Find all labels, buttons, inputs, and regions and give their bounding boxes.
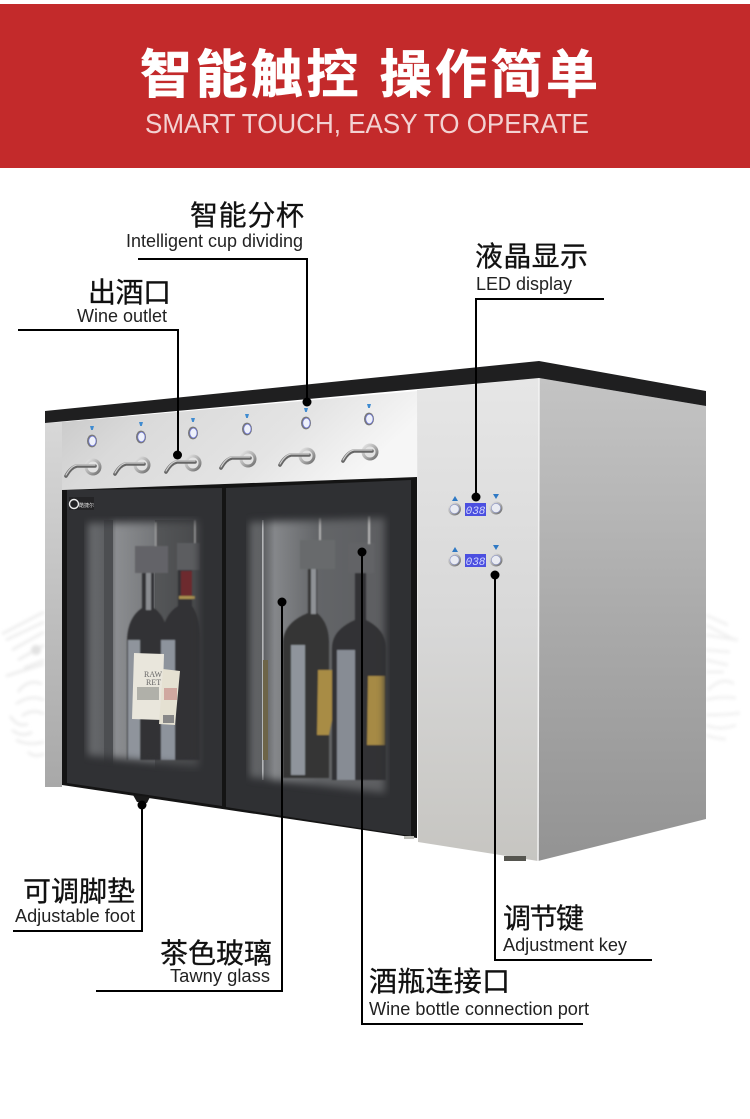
subtitle: SMART TOUCH, EASY TO OPERATE (145, 108, 589, 139)
product: wine dispenser cabinet (45, 361, 706, 861)
left stainless strip (45, 422, 62, 787)
header banner (0, 4, 750, 168)
callout: adjustment key: 调节键 (503, 903, 584, 934)
bottle four (332, 572, 386, 780)
door logo: 酷捷尔 (79, 502, 94, 509)
title: 智能触控 操作简单 (140, 47, 598, 105)
door logo (69, 497, 94, 510)
wine label one (132, 653, 164, 720)
callout: wine bottle connection port: Wine bottle connection port (369, 998, 589, 1019)
wine label one: RAW (144, 670, 162, 679)
black top slab (45, 361, 706, 423)
callout: adjustable foot (13, 800, 146, 931)
callout: wine outlet (18, 277, 182, 460)
left door (67, 488, 222, 806)
door surround (62, 477, 417, 838)
wine label two (159, 669, 180, 725)
callout: wine bottle connection port: 酒瓶连接口 (369, 966, 510, 997)
touch buttons (87, 404, 374, 447)
callout: tawny glass: Tawny glass (170, 965, 270, 986)
callout: LED display (472, 241, 604, 502)
wine label one: RET (146, 678, 161, 687)
LED controls: 038 (466, 506, 486, 518)
callout: LED display: LED display (476, 273, 573, 294)
callout: wine outlet: Wine outlet (77, 305, 167, 326)
background watermark: right vineyard (706, 615, 740, 739)
callout: adjustment key: Adjustment key (503, 934, 628, 955)
callout: adjustable foot: Adjustable foot (15, 905, 135, 926)
bottle three (283, 568, 329, 778)
callout: LED display: 液晶显示 (475, 241, 588, 272)
callout: tawny glass: 茶色玻璃 (160, 938, 272, 969)
callout: adjustable foot: 可调脚垫 (23, 876, 135, 907)
background watermark: left vineyard (2, 612, 44, 756)
bottle two (162, 570, 200, 760)
LED controls (448, 494, 502, 569)
left window with bottles (84, 516, 205, 772)
wine spouts (66, 444, 378, 476)
bottle one (127, 570, 168, 760)
callout: tawny glass (96, 598, 286, 991)
feet (133, 795, 526, 861)
control panel (62, 391, 417, 490)
callout: intelligent cup dividing (126, 200, 312, 406)
right window with bottles (246, 512, 390, 798)
right door (226, 480, 411, 836)
side panel (538, 378, 706, 861)
callout: intelligent cup dividing: Intelligent cup dividing (126, 230, 303, 251)
LED controls: 038 (466, 557, 486, 569)
callout: intelligent cup dividing: 智能分杯 (190, 200, 304, 231)
callout: wine bottle connection port (358, 548, 589, 1024)
callout: wine outlet: 出酒口 (88, 277, 171, 308)
front right stainless panel (417, 378, 539, 861)
callout: adjustment key (490, 570, 652, 960)
